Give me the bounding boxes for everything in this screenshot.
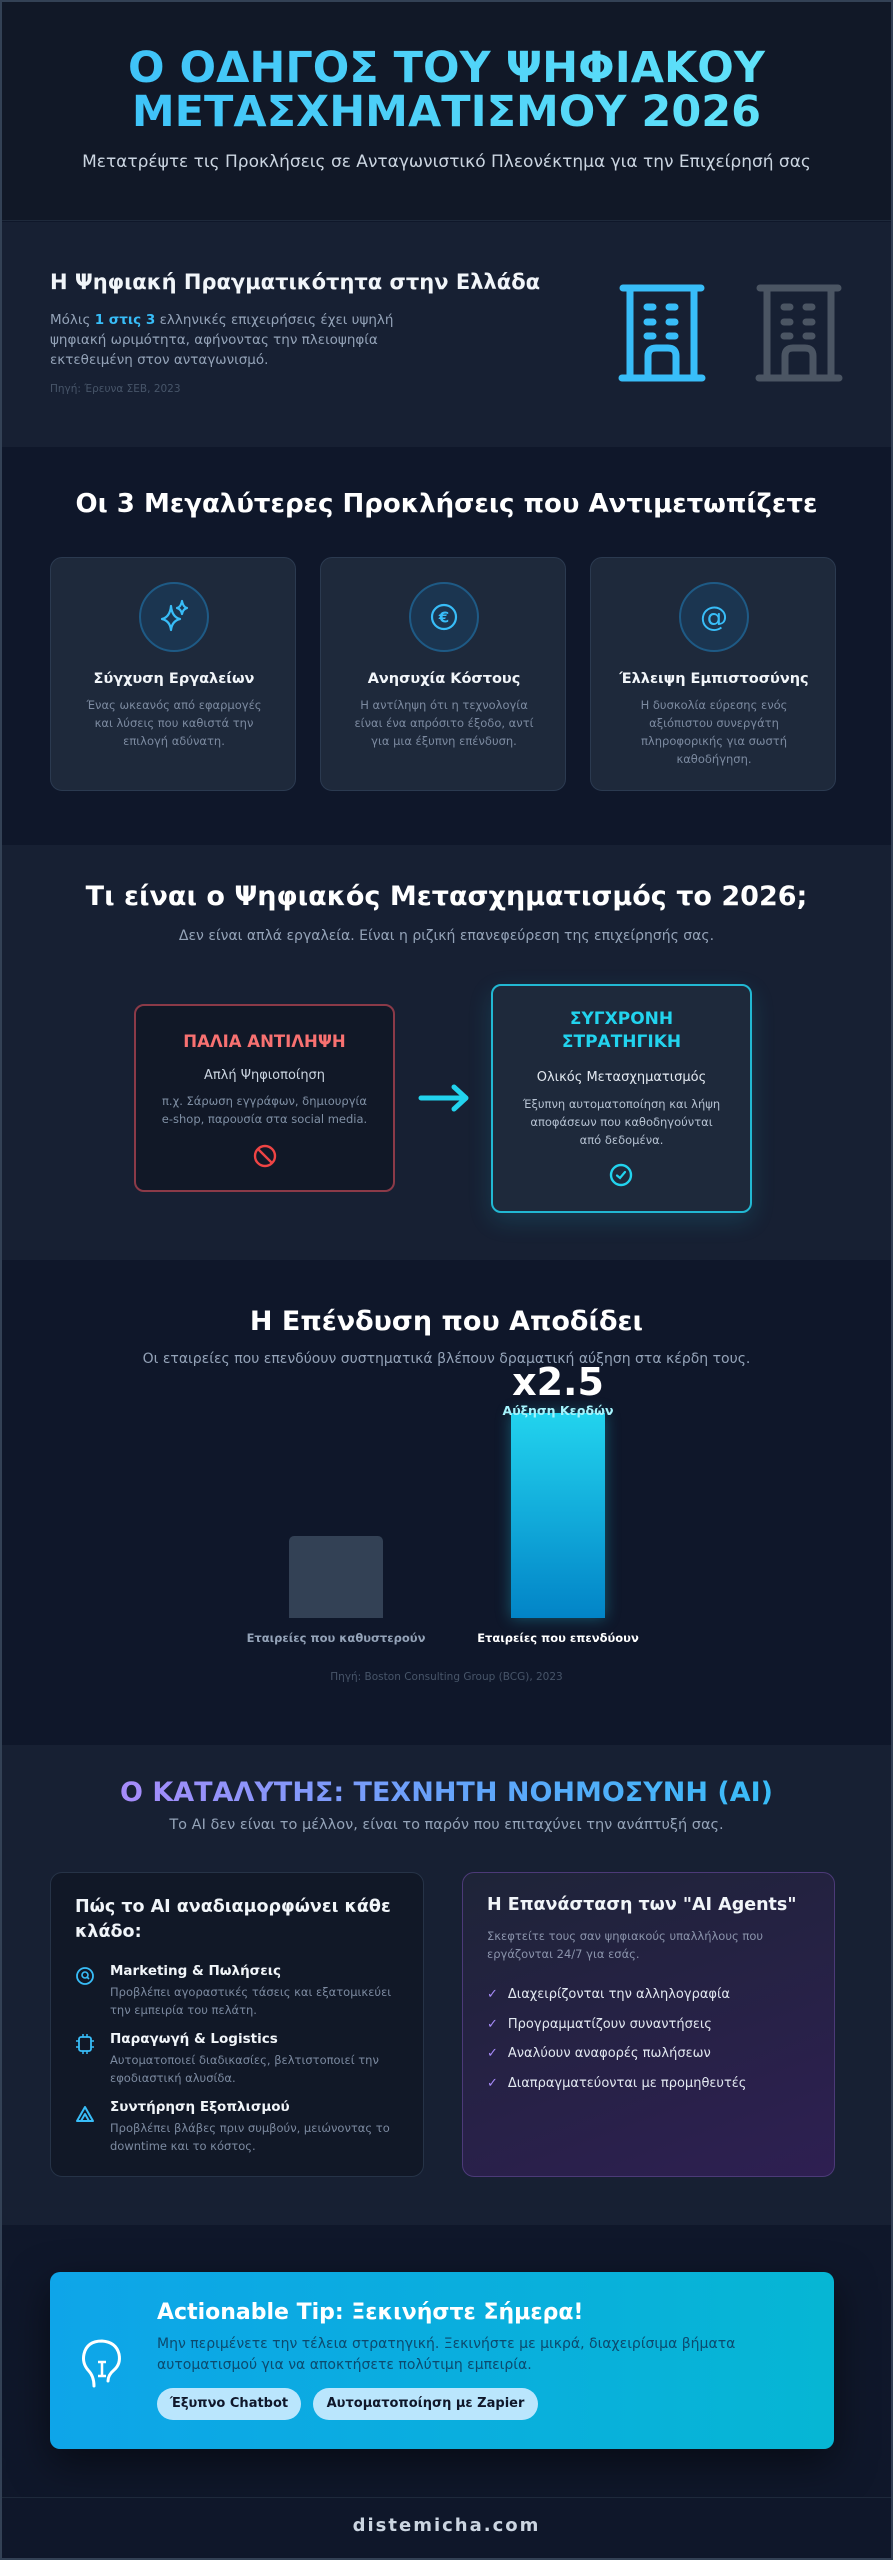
new title [562,1009,681,1052]
checklist: ✓ Διαπραγματεύονται με προμηθευτές [487,2076,746,2090]
icon: search [76,1967,94,1985]
item: maintenance: Προβλέπει βλάβες πριν συμβούν, μειώνοντας το downtime και το κόστος. [110,2121,390,2153]
card title: Ανησυχία Κόστους [368,671,520,687]
section: AI [0,1745,893,2225]
subtitle: Το AI δεν είναι το μέλλον, είναι το παρόν που επιταχύνει την ανάπτυξή σας. [169,1817,724,1833]
title: Ο ΟΔΗΓΟΣ ΤΟΥ ΨΗΦΙΑΚΟΥ [128,43,765,93]
icon: gray building [756,284,842,382]
bar: investing [511,1413,605,1618]
old text: π.χ. Σάρωση εγγράφων, δημιουργία [162,1094,367,1108]
new text [522,1097,720,1147]
item: maintenance [76,2099,390,2153]
card text: Η δυσκολία εύρεσης ενός αξιόπιστου συνεργάτη πληροφορικής για σωστή καθοδήγηση. [641,698,787,766]
card text: Ένας ωκεανός από εφαρμογές και λύσεις που καθιστά την επιλογή αδύνατη. [86,698,262,748]
card: tools [50,557,296,791]
subtitle: Μετατρέψτε τις Προκλήσεις σε Ανταγωνιστικό Πλεονέκτημα για την Επιχείρησή σας [82,152,811,172]
card title: Έλλειψη Εμπιστοσύνης [619,671,809,687]
item: marketing: Marketing & Πωλήσεις [110,1963,281,1979]
icon: euro [409,582,479,652]
section: challenges [0,447,893,845]
icon: euro: € [438,608,449,626]
heading: Τι είναι ο Ψηφιακός Μετασχηματισμός το 2026; [86,881,807,912]
callout: actionable tip [50,2272,834,2449]
bar chart [247,1360,639,1645]
item: production: Παραγωγή & Logistics [110,2031,278,2047]
panel: AI agents [462,1872,835,2177]
new text: από δεδομένα. [580,1133,663,1147]
section: investment [0,1260,893,1745]
icon: tools [76,2106,94,2122]
source: Πηγή: Έρευνα ΣΕΒ, 2023 [50,383,181,395]
old title: ΠΑΛΙΑ ΑΝΤΙΛΗΨΗ [183,1032,346,1051]
button: chatbot: Έξυπνο Chatbot [170,2396,288,2411]
card: trust [590,557,836,791]
card: old approach [134,1004,395,1192]
panel text: Σκεφτείτε τους σαν ψηφιακούς υπαλλήλους που εργάζονται 24/7 για εσάς. [487,1929,763,1961]
footer text: distemicha.com [353,2515,540,2536]
heading: Ο ΚΑΤΑΛΥΤΗΣ: ΤΕΧΝΗΤΗ ΝΟΗΜΟΣΥΝΗ (AI) [120,1777,773,1808]
value label: x2.5 [512,1360,604,1404]
heading: Η Επένδυση που Αποδίδει [250,1306,643,1337]
card: modern strategy [491,984,752,1213]
section: greek reality [0,222,893,447]
item: production [76,2031,379,2085]
icon: check circle [610,1164,632,1186]
old text: e-shop, παρουσία στα social media. [162,1112,367,1126]
card text: Η αντίληψη ότι η τεχνολογία είναι ένα απρόσιτο έξοδο, αντί για μια έξυπνη επένδυση. [354,698,534,748]
heading: Οι 3 Μεγαλύτερες Προκλήσεις που Αντιμετωπίζετε [76,489,817,519]
card: cost [320,557,566,791]
value caption: Αύξηση Κερδών [503,1403,613,1418]
title: ΜΕΤΑΣΧΗΜΑΤΙΣΜΟΥ 2026 [132,87,761,137]
button: zapier [313,2388,538,2420]
panel title: Πώς το AI αναδιαμορφώνει κάθε κλάδο: [75,1897,391,1942]
subtitle: Οι εταιρείες που επενδύουν συστηματικά βλέπουν δραματική αύξηση στα κέρδη τους. [143,1351,750,1367]
section: tip [0,2225,893,2497]
title [0,46,893,134]
new text: αποφάσεων που καθοδηγούνται [530,1115,713,1129]
panel: sectors [50,1872,424,2177]
checklist: ✓ Προγραμματίζουν συναντήσεις [487,2016,712,2032]
label lagging: Εταιρείες που καθυστερούν [247,1631,425,1645]
icon: lightbulb [82,2340,121,2388]
subtitle: Δεν είναι απλά εργαλεία. Είναι η ριζική επανεφεύρεση της επιχείρησής σας. [179,928,714,944]
new subtitle: Ολικός Μετασχηματισμός [537,1070,706,1085]
item: production: Αυτοματοποιεί διαδικασίες, βελτιστοποιεί την εφοδιαστική αλυσίδα. [110,2053,379,2085]
icon: chip [76,2034,94,2054]
paragraph: Μόλις 1 στις 3 ελληνικές επιχειρήσεις έχει υψηλή ψηφιακή ωριμότητα, αφήνοντας την πλειοψηφία εκτεθειμένη στον ανταγωνισμό. [50,312,393,368]
checklist: ✓ Διαχειρίζονται την αλληλογραφία [487,1987,730,2002]
item: marketing [76,1963,391,2017]
icon: blue building [618,284,706,382]
label investing: Εταιρείες που επενδύουν [477,1631,639,1645]
icon: at [679,582,749,652]
bar: lagging [289,1536,383,1618]
source: Πηγή: Boston Consulting Group (BCG), 2023 [330,1671,563,1683]
arrow [418,1084,468,1112]
footer [0,2497,893,2560]
tip text: Μην περιμένετε την τέλεια στρατηγική. Ξεκινήστε με μικρά, διαχειρίσιμα βήματα αυτοματισμού για να αποκτήσετε πολύτιμη εμπειρία. [157,2336,735,2373]
item: maintenance: Συντήρηση Εξοπλισμού [110,2099,290,2115]
old text [162,1094,367,1126]
checklist [487,1987,746,2090]
button: zapier: Αυτοματοποίηση με Zapier [327,2396,524,2411]
heading: Η Ψηφιακή Πραγματικότητα στην Ελλάδα [50,270,540,294]
panel title: Η Επανάσταση των "AI Agents" [487,1895,796,1915]
new text: Έξυπνη αυτοματοποίηση και λήψη [523,1097,720,1111]
new title: ΣΤΡΑΤΗΓΙΚΗ [562,1032,681,1052]
item: marketing: Προβλέπει αγοραστικές τάσεις και εξατομικεύει την εμπειρία του πελάτη. [110,1985,391,2017]
icon: forbidden [254,1144,276,1168]
card title: Σύγχυση Εργαλείων [94,671,254,687]
icon: at: @ [700,600,728,633]
icon: sparkles [139,582,209,652]
new title: ΣΥΓΧΡΟΝΗ [570,1009,673,1029]
button: chatbot [157,2388,301,2420]
section: what is transformation [0,845,893,1260]
checklist: ✓ Αναλύουν αναφορές πωλήσεων [487,2046,711,2061]
header section [0,0,893,221]
old subtitle: Απλή Ψηφιοποίηση [204,1068,325,1083]
tip title: Actionable Tip: Ξεκινήστε Σήμερα! [157,2300,583,2325]
